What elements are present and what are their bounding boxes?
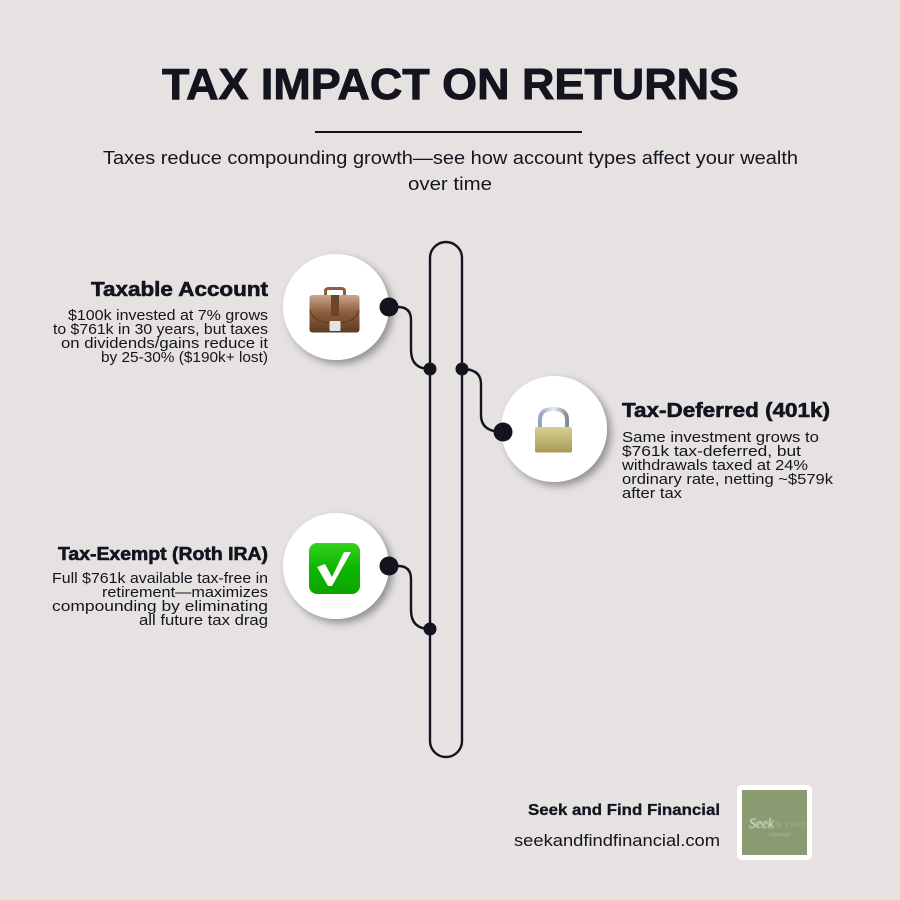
footer brand text (514, 802, 720, 850)
title: TAX IMPACT ON RETURNS (162, 61, 739, 109)
footer brand text: seekandfindfinancial.com (514, 832, 720, 850)
panel: tax-deferred icon circle (494, 376, 607, 482)
description: ordinary rate, netting ~$579k (622, 472, 834, 488)
footer brand text: Seek and Find Financial (528, 802, 720, 819)
subtitle: over time (408, 174, 492, 194)
description (52, 571, 268, 629)
description (53, 308, 268, 366)
description: all future tax drag (139, 613, 268, 629)
description: $761k tax-deferred, but (622, 444, 801, 460)
text block: tax-deferred (621, 400, 834, 502)
logo (737, 785, 812, 860)
text block: taxable account (53, 279, 268, 366)
icon: briefcase (310, 288, 360, 332)
heading: Tax-Exempt (Roth IRA) (58, 544, 268, 564)
description: after tax (622, 486, 683, 502)
connector node (380, 556, 398, 576)
logo: & FIND (776, 820, 807, 829)
connector: taxable account to track (389, 307, 436, 376)
connector node (380, 298, 398, 316)
subtitle (103, 148, 798, 194)
description: withdrawals taxed at 24% (621, 458, 808, 474)
logo: Financial (768, 832, 790, 838)
panel: tax-exempt icon circle (283, 513, 398, 619)
description: to $761k in 30 years, but taxes (53, 322, 268, 338)
connector node (494, 422, 512, 442)
heading: Tax-Deferred (401k) (622, 400, 830, 422)
description: by 25-30% ($190k+ lost) (101, 350, 268, 366)
icon: check mark (309, 543, 360, 594)
connector: tax-exempt to track (389, 566, 436, 636)
heading: Taxable Account (91, 279, 268, 301)
logo: Seek (749, 816, 774, 832)
description: compounding by eliminating (52, 599, 268, 615)
connector: tax-deferred to track (456, 362, 503, 432)
description: Full $761k available tax-free in (52, 571, 268, 587)
central timeline track (430, 242, 462, 757)
subtitle: Taxes reduce compounding growth—see how account types affect your wealth (103, 148, 798, 168)
description: on dividends/gains reduce it (61, 336, 268, 352)
icon: padlock (535, 409, 572, 452)
description: $100k invested at 7% grows (68, 308, 268, 324)
panel: taxable account icon circle (283, 254, 398, 360)
description: retirement—maximizes (102, 585, 268, 601)
description: Same investment grows to (622, 430, 819, 446)
description (621, 430, 834, 502)
text block: tax-exempt (52, 544, 268, 629)
